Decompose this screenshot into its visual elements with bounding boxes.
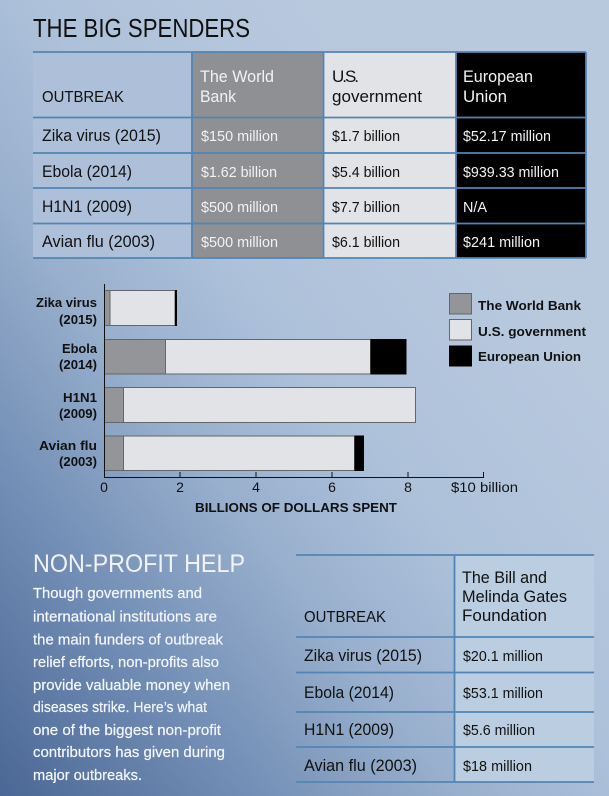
column: the world bank: $500 million (201, 235, 278, 251)
axis tick labels: 2 (176, 479, 184, 495)
axis tick labels: 0 (100, 479, 108, 495)
column: outbreak: Avian flu (2003) (304, 756, 417, 775)
category labels: (2015) (59, 312, 97, 327)
axis tick labels: $10 billion (451, 479, 518, 495)
column: european union: N/A (463, 200, 487, 216)
legend: U.S. government (478, 324, 587, 339)
text block: non-profit description: contributors has given during (33, 744, 225, 761)
axis title: BILLIONS OF DOLLARS SPENT (195, 500, 397, 515)
bar chart: billions of dollars spent (36, 284, 518, 515)
column: the world bank: $150 million (201, 129, 278, 145)
column: european union: $241 million (463, 235, 540, 251)
text block: non-profit description: diseases strike. Here’s what (33, 699, 208, 716)
category labels: Zika virus (36, 295, 97, 310)
legend (449, 294, 587, 366)
text block: non-profit description (33, 585, 230, 784)
column: u.s. government: government (332, 87, 422, 106)
column: the world bank (200, 67, 278, 251)
category labels: Avian flu (39, 438, 97, 453)
category labels (36, 295, 98, 469)
column: european union (463, 67, 559, 251)
column: gates foundation: $5.6 million (463, 723, 535, 739)
column: outbreak: H1N1 (2009) (42, 197, 132, 216)
bar: h1n1 (104, 388, 416, 422)
text block: non-profit description: one of the biggest non-profit (33, 722, 222, 739)
column: outbreak: Ebola (2014) (42, 162, 132, 181)
axis tick labels: 8 (404, 479, 412, 495)
column: european union: Union (463, 87, 507, 106)
bar: ebola (104, 339, 406, 374)
legend: European Union (478, 349, 581, 364)
heading: non-profit help: NON-PROFIT HELP (33, 550, 245, 578)
column: u.s. government (332, 67, 422, 251)
text block: non-profit description: international institutions are (33, 608, 217, 626)
column: gates foundation: $18 million (463, 759, 532, 775)
text block: non-profit description: provide valuable money when (33, 677, 230, 694)
column: u.s. government: $5.4 billion (332, 165, 400, 181)
legend: The World Bank (478, 298, 582, 313)
column: u.s. government: $1.7 billion (332, 129, 400, 145)
column: outbreak: OUTBREAK (42, 89, 125, 106)
axis tick labels: 6 (328, 479, 336, 495)
column: outbreak (42, 89, 161, 251)
text block: non-profit description: Though governments and (33, 585, 202, 602)
axes (104, 284, 484, 478)
column: outbreak (304, 609, 422, 775)
panel: spending table (33, 52, 586, 258)
column: gates foundation: $53.1 million (463, 686, 543, 702)
column: u.s. government: $6.1 billion (332, 235, 400, 251)
column: the world bank: Bank (200, 87, 236, 106)
title: the big spenders: THE BIG SPENDERS (33, 13, 250, 43)
bar: avian flu (104, 436, 364, 471)
column: european union: $52.17 million (463, 129, 551, 145)
column: outbreak: Ebola (2014) (304, 683, 394, 702)
category labels: (2003) (59, 454, 97, 469)
category labels: (2014) (59, 357, 97, 372)
category labels: (2009) (59, 406, 97, 421)
column: european union: $939.33 million (463, 165, 559, 181)
axis tick labels: 4 (252, 479, 260, 495)
column: outbreak: Zika virus (2015) (304, 646, 422, 665)
category labels: H1N1 (63, 390, 97, 405)
panel: gates foundation table (296, 555, 594, 782)
bar: zika virus (104, 290, 177, 326)
column: the world bank: The World (200, 67, 274, 86)
column: outbreak: Zika virus (2015) (42, 126, 161, 145)
text block: non-profit description: major outbreaks. (33, 767, 142, 784)
text block: non-profit description: relief efforts, non-profits also (33, 654, 219, 671)
column: european union: European (463, 67, 533, 86)
column: gates foundation: The Bill and (462, 568, 547, 587)
column: outbreak: OUTBREAK (304, 609, 387, 626)
axis tick labels (100, 479, 518, 495)
column: gates foundation: Foundation (462, 606, 547, 625)
column: outbreak: Avian flu (2003) (42, 232, 155, 251)
column: gates foundation: Melinda Gates (462, 587, 567, 606)
column: u.s. government: U.S. (332, 67, 359, 86)
column: gates foundation: $20.1 million (463, 649, 543, 665)
text block: non-profit description: the main funders of outbreak (33, 632, 223, 648)
column: outbreak: H1N1 (2009) (304, 720, 394, 739)
category labels: Ebola (62, 341, 98, 356)
column: u.s. government: $7.7 billion (332, 200, 400, 216)
column: the world bank: $1.62 billion (201, 165, 277, 181)
column: the world bank: $500 million (201, 200, 278, 216)
column: gates foundation (462, 568, 567, 775)
